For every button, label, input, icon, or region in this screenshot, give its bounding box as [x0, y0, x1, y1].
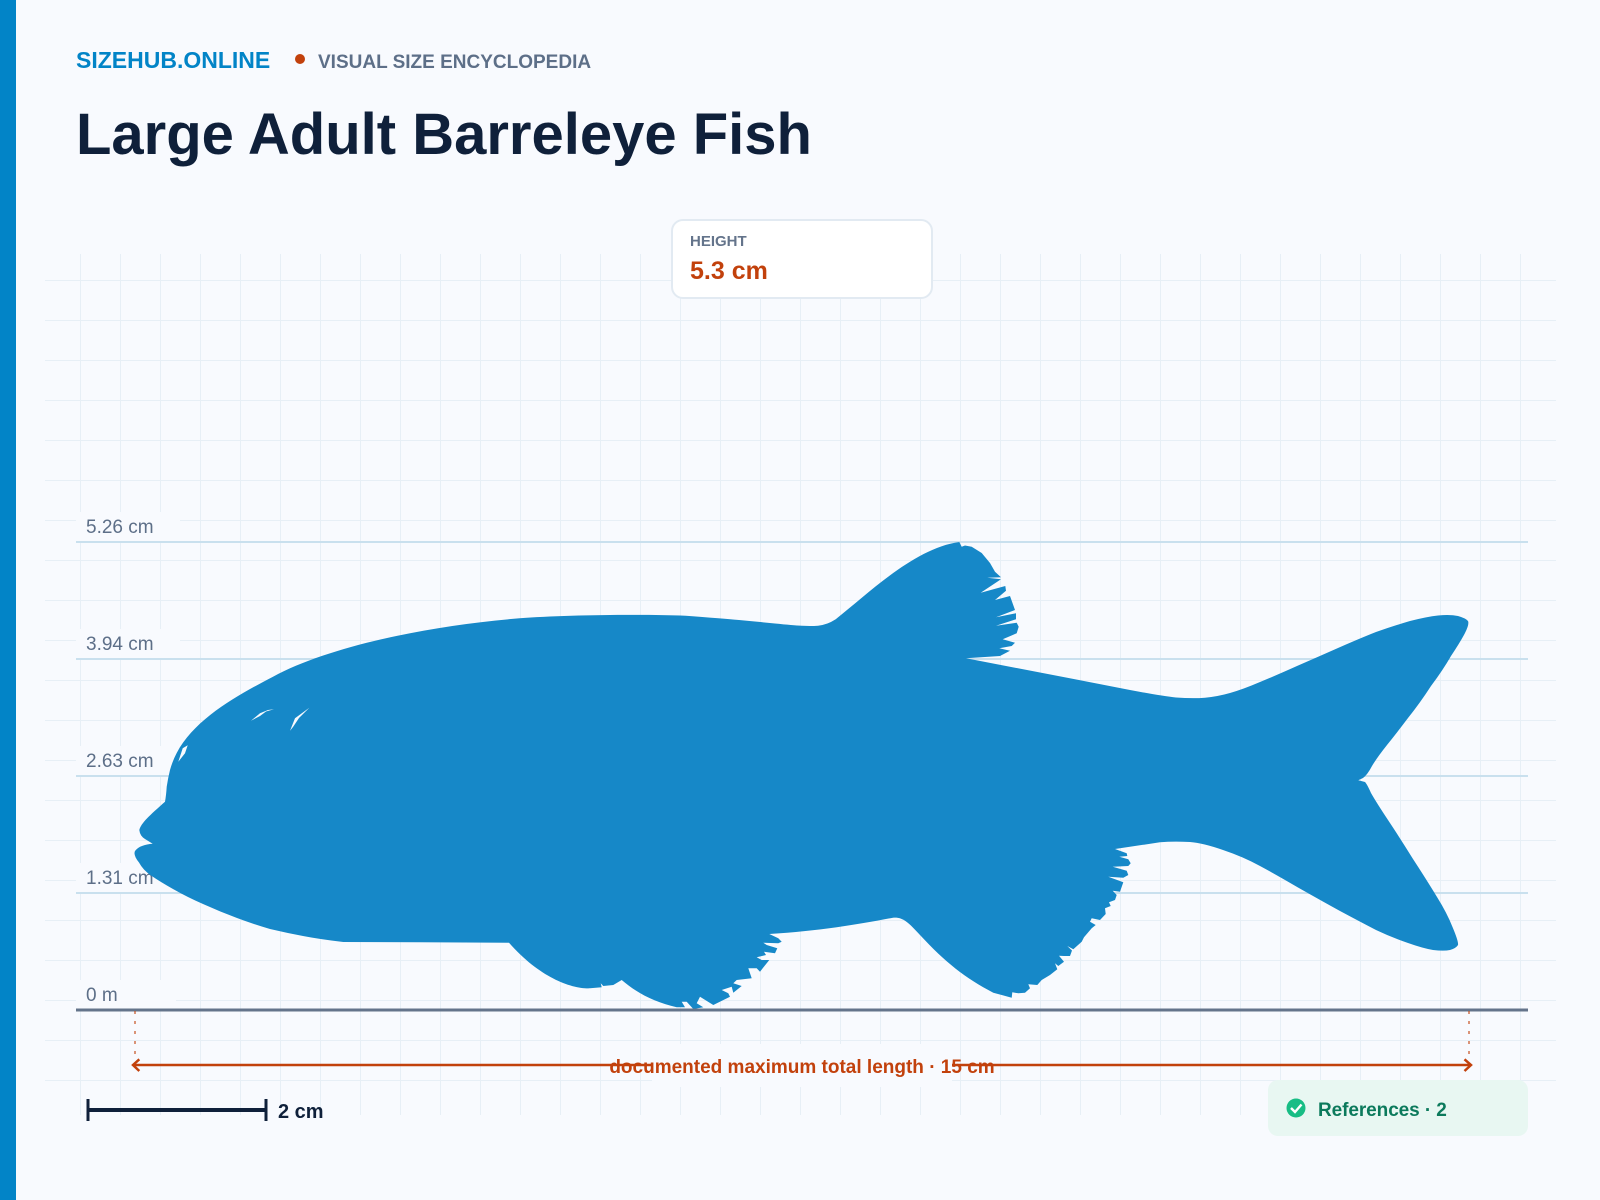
height axis labels: 2.63 cm: [86, 751, 154, 772]
length caption: documented maximum total length · 15 cm: [609, 1057, 995, 1078]
background grid: [45, 254, 1556, 1115]
header: brand line: [76, 47, 591, 73]
height axis labels: [76, 512, 180, 1009]
length dimension arrow: [133, 1011, 1471, 1071]
tagline: VISUAL SIZE ENCYCLOPEDIA: [318, 52, 591, 73]
scale label: 2 cm: [278, 1101, 324, 1123]
references badge: [1268, 1080, 1528, 1136]
icon: check: [1286, 1098, 1306, 1118]
height gridlines: [76, 542, 1528, 893]
height value: 5.3 cm: [690, 257, 768, 285]
title: Large Adult Barreleye Fish: [76, 102, 812, 167]
height axis labels: 3.94 cm: [86, 634, 154, 655]
height axis labels: 1.31 cm: [86, 868, 154, 889]
references text: References · 2: [1318, 1100, 1447, 1121]
fish silhouette: [134, 542, 1468, 1009]
left accent bar: [0, 0, 16, 1200]
brand dot: [295, 54, 305, 64]
length caption: [609, 1044, 995, 1087]
ground line: [76, 1008, 1528, 1012]
height label: HEIGHT: [690, 233, 747, 250]
brand name: SIZEHUB.ONLINE: [76, 47, 270, 73]
height card: [672, 220, 932, 298]
height axis labels: 0 m: [86, 985, 118, 1006]
height axis labels: 5.26 cm: [86, 517, 154, 538]
